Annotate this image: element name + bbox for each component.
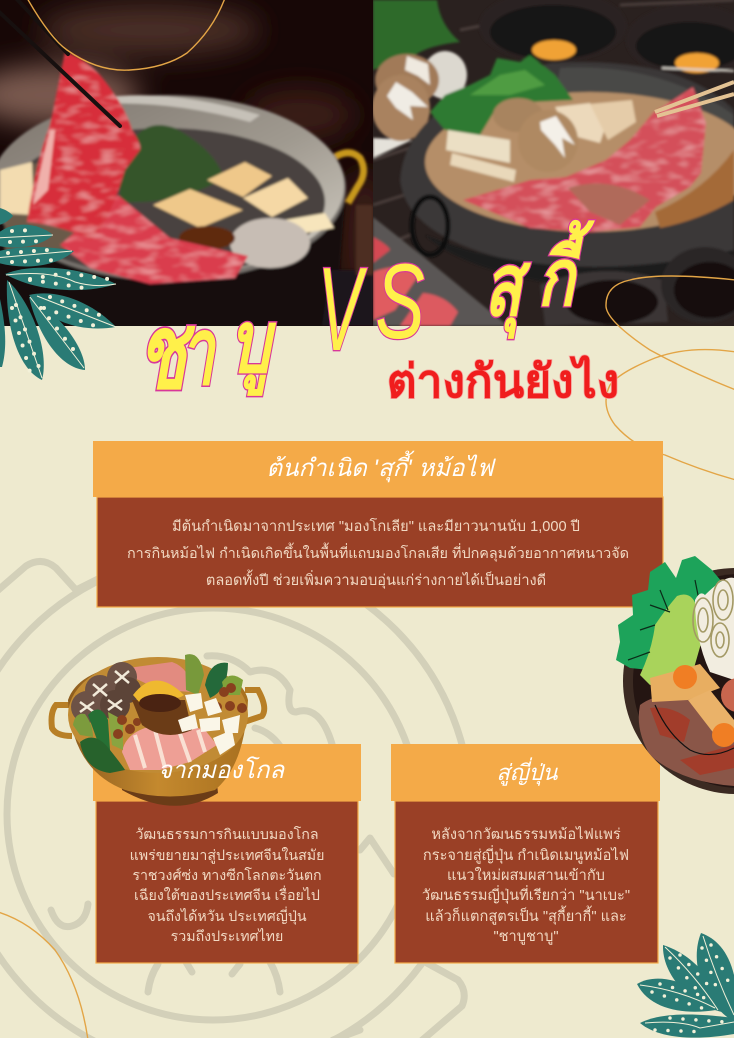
bowl	[623, 568, 734, 794]
leek rolls	[695, 578, 734, 680]
leaf cluster: top left	[0, 207, 116, 380]
fried tofu	[650, 664, 720, 702]
handle ring	[412, 197, 448, 255]
pot ingredients	[71, 654, 247, 773]
meat	[463, 87, 706, 232]
background line art: hot pot outline	[0, 554, 471, 1038]
tofu	[0, 162, 334, 233]
herbs and mushrooms at the left	[373, 0, 460, 70]
panel body	[395, 801, 658, 963]
panel header	[391, 744, 660, 801]
panel header title: จากมองโกล	[158, 756, 285, 784]
heading: Shabu VS Suki: กี้	[537, 219, 595, 322]
panel text	[130, 826, 324, 945]
leek	[446, 130, 510, 163]
panel body	[96, 801, 358, 963]
mushrooms	[493, 98, 543, 132]
chopsticks	[655, 82, 734, 116]
panel text: "ชาบูชาบู"	[493, 929, 559, 945]
heading: Shabu VS Suki: ช	[138, 295, 195, 411]
panel text: จนถึงได้หวัน ประเทศญี่ปุ่น	[147, 906, 307, 925]
lifted meat	[27, 52, 140, 240]
panel header	[93, 744, 361, 801]
photo: sukiyaki pot with eggs and vegetables	[372, 0, 734, 326]
small sauce dishes	[540, 271, 668, 326]
panel text: กระจายสู่ญี่ปุ่น กำเนิดเมนูหม้อไฟ	[423, 845, 629, 864]
heading: Shabu VS Suki: า	[180, 299, 217, 404]
egg bowls	[489, 4, 617, 62]
leaf cluster: bottom right	[637, 933, 734, 1038]
greens	[120, 125, 224, 202]
panel: origin of suki hot pot	[93, 441, 663, 607]
heading: Shabu VS Suki: บู	[229, 295, 277, 397]
bottom meat	[60, 195, 248, 284]
heading: Shabu VS Suki: S	[375, 243, 425, 361]
greens	[430, 55, 573, 135]
panel text: เฉียงใต้ของประเทศจีน เรื่อยไป	[134, 885, 320, 904]
panel text: วัฒนธรรมการกินแบบมองโกล	[135, 826, 319, 843]
photo: shabu pot with meat and chopsticks	[0, 0, 391, 326]
panel text: แล้วก็แตกสูตรเป็น "สุกี้ยากี้" และ	[425, 905, 627, 925]
heading: Shabu VS Suki: V	[318, 244, 367, 376]
panel text: แนวใหม่ผสมผสานเข้ากับ	[447, 866, 605, 884]
pot base and body	[122, 775, 218, 806]
heading: Shabu VS Suki	[138, 219, 595, 411]
plate with raw meat	[373, 217, 508, 326]
noodles	[230, 218, 310, 268]
panel text: ตลอดทั้งปี ช่วยเพิ่มความอบอุ่นแก่ร่างกายได้เป็นอย่างดี	[206, 569, 546, 589]
pot rim and wall	[0, 95, 346, 281]
panel: from Mongolia	[93, 744, 361, 963]
panel text: การกินหม้อไฟ กำเนิดเกิดขึ้นในพื้นที่แถบมองโกลเสีย ที่ปกคลุมด้วยอากาศหนาวจัด	[127, 542, 629, 562]
heading: Shabu VS Suki: สุ	[484, 237, 532, 339]
panel text: วัฒนธรรมญี่ปุ่นที่เรียกว่า "นาเบะ"	[422, 885, 630, 904]
gold handle	[335, 153, 364, 203]
panel: to Japan	[391, 744, 660, 963]
panel header title: สู่ญี่ปุ่น	[496, 757, 559, 786]
panel text: รวมถึงประเทศไทย	[171, 928, 283, 945]
pot	[400, 62, 734, 272]
meat slices	[639, 696, 734, 786]
panel header title: ต้นกำเนิด 'สุกี้' หม้อไฟ	[266, 450, 496, 483]
chopsticks	[0, 0, 120, 126]
panel text	[127, 517, 629, 589]
panel text: หลังจากวัฒนธรรมหม้อไฟแพร่	[431, 825, 621, 843]
tofu	[555, 103, 606, 143]
panel body	[97, 497, 663, 607]
panel text: มีต้นกำเนิดมาจากประเทศ "มองโกเลีย" และมียาวนานนับ 1,000 ปี	[172, 517, 580, 535]
panel text: แพร่ขยายมาสู่ประเทศจีนในสมัย	[130, 847, 324, 864]
pot handles	[52, 705, 72, 736]
subheading: how are they different: ต่างกันยังไง	[387, 355, 619, 407]
panel text	[422, 825, 630, 945]
mushroom	[721, 678, 734, 712]
panel header	[93, 441, 663, 497]
panel text: ราชวงศ์ซ่ง ทางซีกโลกตะวันตก	[132, 867, 322, 884]
illustration: sukiyaki bowl	[616, 556, 734, 794]
leafy greens	[616, 556, 722, 670]
carrot flowers	[673, 665, 697, 689]
illustration: Mongolian hot pot	[52, 654, 264, 806]
